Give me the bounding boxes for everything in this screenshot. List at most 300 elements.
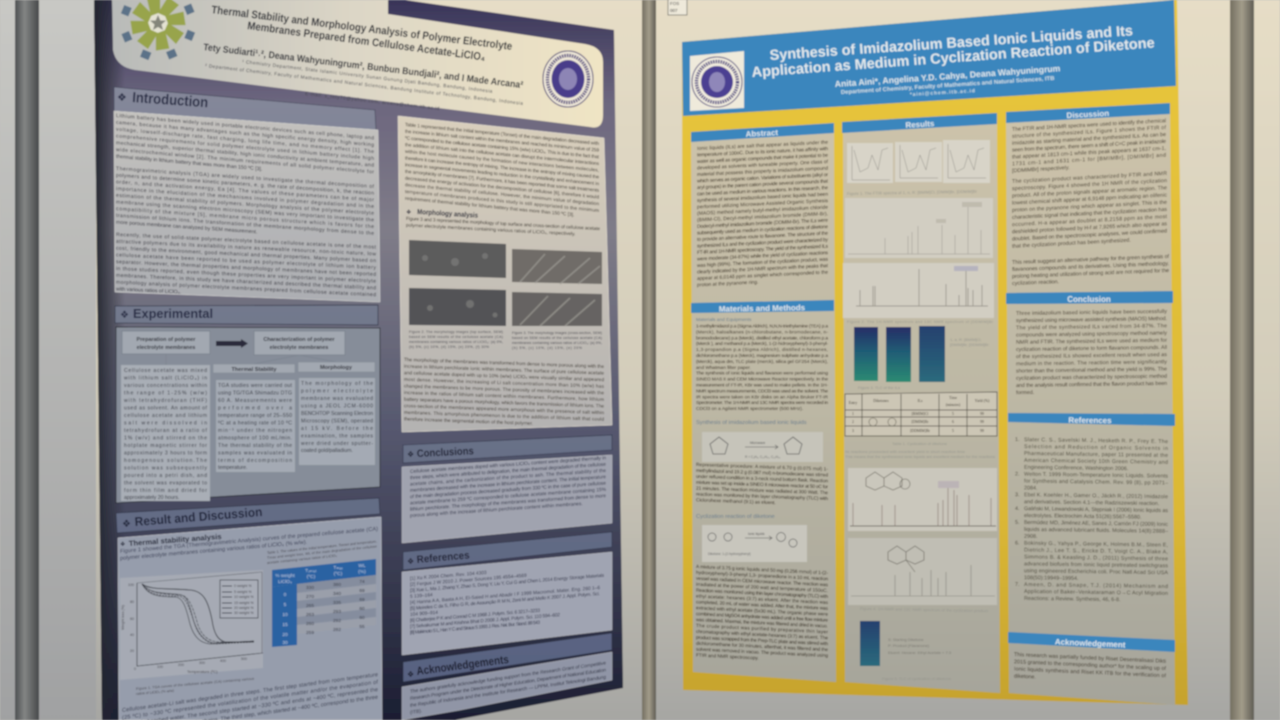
text box: introduction right column with morphology analysis: cross-section of the membranes appeared more amorphous with the presence of salt within	[404, 403, 604, 416]
heading bar: Conclusion: Conclusion	[1067, 295, 1111, 304]
table: cyclization of diketone: [DMIM]Br	[911, 420, 929, 424]
abstract text: Dodecyl-methyl imidazolium bromide (DDMIM-Br). The ILs were	[697, 218, 828, 230]
icon: ITB university seal	[543, 51, 593, 107]
materials text: 1,3-propandion p.a (Sigma Aldrich), distilled n-hexanes,	[696, 347, 828, 353]
acknowledgement text: 2015 granted to the corresponding author* for the scaling up of	[1014, 659, 1166, 672]
acknowledgement text: diketone.	[1014, 674, 1036, 681]
conclusion text: The yield of the synthesized ILs varied from 34-87%. The	[1016, 323, 1167, 331]
text box: introduction left column: attractive polymers due to its availability in nature as renewable resource, non-toxic nature, low	[116, 239, 376, 258]
table caption and notes: Its reactions proceeded with excellent yield in short reaction time	[845, 449, 966, 454]
text box: preparation procedure	[121, 365, 210, 501]
text box: introduction right column with morphology analysis: and cellulose acetate doped with up to 10% (w/w) LiClO₄ were visually similar and appeared	[404, 370, 604, 383]
TGA line chart: 400	[220, 659, 226, 663]
subheading: morphology analysis: ❖	[406, 210, 411, 216]
1H NMR spectrum	[845, 198, 993, 258]
TLC plates: 1, a, R: [BMIM]Cl,	[950, 337, 982, 342]
result panel: Figure 1 showed the TGA (Thermogravimetric Analysis) curves of the prepared cellulose acetate (CA)	[120, 526, 378, 555]
heading bar: Acknowledgement	[1008, 632, 1175, 652]
label: poster board number: 007	[670, 8, 678, 13]
chart legend: 5 weight %	[234, 590, 252, 594]
poster title: Thermal Stability and Morphology Analysis of Polymer Electrolyte	[211, 4, 513, 53]
TLC caption: Figure 3. TLC of the ILs	[858, 385, 900, 390]
references list: Selection and Reduction of Organic Solvents in	[1024, 444, 1168, 452]
cyclization procedure text: A mixture of 3.75 g ionic liquids and 50 mg (0,256 mmol) of 1-(2-	[696, 564, 828, 576]
materials text: CDCl3 on a Agilent NMR spectrometer (500 MHz).	[696, 406, 803, 412]
subheading: synthesis of ionic liquids: Synthesis of imidazolium based ionic liquids	[696, 420, 807, 426]
references list: 6.	[1015, 541, 1019, 547]
table: cyclization of diketone: Yield (%)	[975, 399, 990, 403]
TGA line chart	[120, 570, 263, 680]
materials text: (Merck ), and methanol p.a (Merck), 1-(2-hidroxyphenyl)-3-phenyl-	[696, 341, 828, 347]
representative procedure text: Representative procedure: A mixture of 6.70 g (0.075 mol) 1-	[696, 462, 828, 473]
references list: 4.	[1015, 506, 1019, 512]
table: cyclization of diketone: 5	[952, 412, 954, 416]
text box: introduction right column with morphology analysis: battery separators have a porous morphology, which favors the transmission of lithium ions. The	[404, 397, 604, 410]
text box: introduction left column: membranes. Therefore, in this study we have characterized and described the thermal stability and	[116, 273, 376, 292]
table: thermal properties by LiClO4 content: 69	[359, 588, 365, 594]
text box: introduction right column with morphology analysis: ºC corresponded to the cellulose acetate containing 15% (w/w) LiClO₄. This is due to the fact that	[405, 135, 600, 160]
column: thermal stability: temperature range of 25–550	[218, 413, 292, 419]
SEM figure captions: based on SEM results of the cellulose acetate (CA)	[512, 336, 602, 340]
TLC plates: [DMIM]Br, [DDMIM]Br	[950, 342, 989, 347]
text box: introduction left column: comprehensive requirements for solid polymer electrolyte used in lithium battery include high	[116, 133, 374, 162]
table: thermal properties by LiClO4 content: Tₘₐₓ	[333, 565, 343, 571]
product 1H NMR with structure	[848, 468, 997, 531]
text box: introduction right column with morphology analysis: the increase in lithium salt content within the membranes and reached its minimum value of 259	[405, 129, 599, 154]
references list: using engineered Escherichia coli. Proc Natl Acad Sci USA	[1024, 568, 1168, 576]
abstract text: proton at the pyranone ring.	[697, 279, 758, 288]
references list: Dietrich J., Lee T. S., Ericke D. T, Voigt C. A., Blake A,	[1024, 548, 1168, 556]
SEM figure captions: Figure 2. The morphology images (top surface, SEM)	[409, 330, 503, 334]
table: thermal properties by LiClO4 content: (%)	[358, 569, 366, 575]
column: morphology	[298, 362, 375, 465]
discussion text: imidazole as starting material and the synthesized ILs. As can be	[1012, 132, 1166, 147]
text box: introduction left column: polymers and to determine some kinetic parameters, e. g. the rate of decomposition, k, the reaction	[116, 173, 374, 197]
authors and affiliations: E-mail: s_tety70@yahoo.com, arcana@chem.itb.ac.id	[305, 91, 440, 112]
authors and affiliations: Tety Sudiarti¹˒², Deana Wahyuningrum², Bunbun Bundjali², and I Made Arcana²	[203, 42, 524, 91]
table: thermal properties by LiClO4 content: 60	[359, 615, 365, 621]
materials text: SINEO MAS II and CEM Microwave Reactor respectively. In the	[696, 377, 828, 383]
column: thermal stability: temperature.	[218, 465, 247, 471]
arrow: preparation to characterization	[216, 339, 248, 348]
text box: introduction left column: compatibility of the mixture [5], membrane micro porous structure which is favors for the	[116, 206, 374, 230]
table: thermal properties by LiClO4 content: % weight	[275, 573, 295, 579]
table: thermal properties by LiClO4 content: 282	[333, 627, 341, 633]
table: cyclization of diketone: [DDMIM]Br	[910, 429, 931, 433]
text box: introduction right column with morphology analysis: therefore increase the segmental motion of the host polymer.	[404, 416, 533, 427]
materials text: Materials and Equipments	[696, 317, 752, 323]
text box: preparation procedure: with tetrahydrofuran (THF)	[124, 398, 207, 404]
conclusion text: medium in the reaction. The reaction time were significantly	[1016, 359, 1167, 367]
conclusion text: Three imidazolium based ionic liquids have been successfully	[1016, 309, 1167, 317]
chart legend: 0 weight %	[234, 584, 252, 588]
SEM figure captions: based on SEM results of the cellulose acetate (CA)	[409, 335, 503, 339]
heading bar: Discussion	[1006, 103, 1170, 123]
materials text: 1-methylimidazol p.a (Sigma Aldrich), N,N,N-triethylamine (TEA) p.a	[696, 324, 828, 330]
references list: Simmons B. & Keasling J. D., (2011) Synthesis of three	[1024, 554, 1168, 562]
section: acknowledgements	[402, 633, 612, 720]
acknowledgement text: This research was partially funded by Riset Desentralisasi Dikti	[1014, 652, 1166, 665]
conclusion text: shorter than the conventional method and the yield is 99%. The	[1016, 366, 1167, 375]
abstract text: which serves as organic cation. Variations of substituents (alkyl or	[697, 172, 828, 184]
references list: 5.	[1015, 520, 1019, 526]
poster title: Membranes Prepared from Cellulose Acetate-LiClO₄	[247, 20, 486, 64]
result panel: polymer electrolyte membranes containing various ratios of LiClO₄ (% w/w).	[120, 540, 308, 562]
table: thermal properties by LiClO4 content: 263	[306, 612, 314, 618]
chart caption: ratios of LiClO₄ (% w/w)	[136, 689, 174, 696]
chart caption: Figure 1. TGA curves of the cellulose acetate (CA) containing various	[136, 677, 254, 691]
abstract text: to provide an alternative route to flavanone. The structure of the	[697, 231, 828, 243]
heading bar: Acknowledgements	[403, 633, 612, 682]
heading bar: References: ❖	[407, 557, 414, 566]
heading bar: Results	[842, 113, 997, 133]
subheading: cyclization reaction: Cyclization reaction of diketone	[696, 514, 775, 520]
cyclization procedure text	[696, 564, 829, 665]
table: thermal properties by LiClO4 content: 30	[282, 640, 288, 646]
TGA line chart: 80	[130, 600, 134, 604]
references list: [2] Fergus J W 2010 J. Power Sources 195 4554–4569	[410, 573, 527, 588]
references list: 2.	[1015, 472, 1019, 478]
references list: Galiński M, Lewandowski A, Stępniak I (2006) Ionic liquids as	[1024, 506, 1168, 514]
references list	[402, 552, 612, 655]
references list: [3] Xue L, Ma J, Zhang Y, Zhao S, Dong Y, Liu Y, Cui G and Chen L 2014 Energy Storage Materials	[410, 573, 605, 594]
table: thermal properties by LiClO4 content: 20	[282, 632, 288, 638]
product TLC plate: Eluent: Hexane: Ethyl Acetate = 7:3	[888, 650, 952, 655]
table: thermal properties by LiClO4 content: 5	[284, 602, 287, 608]
column: thermal stability: performed over a	[218, 406, 292, 412]
abstract text	[697, 140, 829, 288]
references list: Ebel K. Koehler H., Gamer O., Jäckh R., (2012) Imidazole	[1024, 492, 1168, 500]
references list: Engineering Conference, Washington 2006.	[1024, 465, 1128, 472]
table: thermal properties by LiClO4 content: 330	[306, 585, 314, 591]
column: morphology: using a JEOL JCM-6000	[301, 404, 373, 410]
table caption and notes: This means that the synthesized ionic liquids are excellent medium for the reactions	[845, 454, 995, 459]
references list: and derivatives. Section 4.1—the Radziszewski reaction.	[1024, 499, 1159, 507]
section: introduction	[114, 87, 612, 432]
text box: introduction left column: wide electrochemical window [2]. The minimum requirements of all solid polymer electrolyte for	[116, 147, 374, 176]
conclusion text: NMR and FTIR. The synthesized ILs were used as medium for	[1016, 338, 1167, 346]
table: thermal properties by LiClO4 content: Tₒₙₛₑₜ	[305, 568, 317, 574]
references list: American Chemical Society 10th Green Chemistry and	[1024, 458, 1168, 466]
heading bar: Materials and Methods: Materials and Methods	[719, 303, 806, 314]
TGA line chart: 100	[128, 583, 134, 587]
column: morphology: The morphology of the	[301, 381, 373, 387]
conclusion text: compounds were analyzed using spectroscopy method namely	[1016, 330, 1167, 339]
step box: preparation: electrolyte membranes	[137, 345, 195, 351]
table: thermal properties by LiClO4 content: acetate containing various ratios of LiClO₄	[267, 554, 338, 565]
table: cyclization of diketone: 99	[980, 420, 984, 424]
table: cyclization of diketone: Diketones	[873, 399, 889, 403]
text box: introduction left column: Lithium battery has been widely used in portable electronic devices such as cell phone, laptop and	[116, 113, 374, 142]
TGA line chart: 200	[178, 663, 184, 667]
product 13C NMR with structure	[848, 538, 997, 605]
step box: preparation	[122, 331, 210, 354]
abstract text: synthesized ILs and the cyclization product were characterized by	[697, 237, 828, 249]
table: thermal properties by LiClO4 content: 380	[333, 582, 341, 588]
FTIR caption: Figure 1. The FTIR spectra of 1, n, R: [BMIM]Cl, [DMIM]Br, [DDMIM]Br	[847, 189, 978, 196]
table: thermal properties by LiClO4 content: 292	[333, 618, 341, 624]
references list: for Synthesis and Catalysis Chem. Rev. 99 (8), pp 2071–	[1024, 479, 1168, 487]
cyclization procedure text: was obtained. Maxmai, the mixture was filtered and dried in vacuo.	[696, 617, 828, 630]
column: morphology: Morphology	[320, 365, 353, 371]
representative procedure text: mixture was set up inside a SINEO II microwave reactor at 50 oC for	[696, 480, 828, 490]
table: thermal properties by LiClO4 content: 0	[284, 592, 287, 598]
conclusions text box: three steps, which were attributed to delignation, the main thermal degradation of the cellulose	[410, 462, 606, 481]
table: cyclization of diketone: 2	[852, 420, 854, 424]
table: thermal properties by LiClO4 content: 10	[282, 612, 288, 618]
step box: characterization: Characterization of polymer	[263, 337, 336, 343]
title panel	[112, 0, 603, 128]
column 3: discussion, conclusion, references, acknowledgement	[1006, 103, 1175, 705]
heading bar: Introduction: ❖	[117, 92, 127, 104]
materials text: (Merck), haloalkanes (n-chlorobutane, n-bromodecane, n-	[696, 329, 828, 335]
heading bar: References: References	[1068, 416, 1112, 425]
table: cyclization of diketone: 3	[852, 429, 854, 433]
discussion text: [DDMIMBr] respectively.	[1012, 165, 1070, 174]
heading bar: Conclusions	[403, 435, 612, 463]
SEM figure captions: (b) 5%, (c) 10%, (d) 15%, (e) 20%, (f) 30%	[409, 345, 490, 349]
representative procedure text: methylindazol and 19.2 g (0.087 mol) n-bromodecane was stirred	[696, 468, 828, 479]
table caption and notes: Table 1. Cyclization of diketone	[892, 441, 948, 446]
conclusion text: synthesized using microwave assisted synthesis (MAOS) Method.	[1016, 316, 1167, 324]
conclusions text box: membranes decreased with the increase in lithium perchlorate content. The initial temperature	[410, 474, 606, 494]
column 1: abstract and materials	[691, 123, 836, 682]
representative procedure text: Ciclorohexe methanol (9:1) as eluent.	[696, 497, 776, 506]
table: thermal properties by LiClO4 content: 260	[306, 621, 314, 627]
column 3: discussion, conclusion, references, acknowledgement: characteristic signal that indicating that the cyclization reaction has	[1012, 207, 1167, 221]
text box: preparation procedure: various concentrations within	[124, 383, 207, 389]
column 2: results	[842, 113, 1000, 693]
column: thermal stability: terms of decomposition	[218, 458, 292, 464]
product TLC plate	[860, 621, 952, 666]
column: morphology: polymer electrolyte	[301, 388, 373, 394]
text box: introduction left column: cost, friendly to the environment, good mechanical and thermal properties. Many polymer based on	[116, 246, 376, 264]
NMR caption: Figure 2. The 1H-NMR spectrum and 13C NMR spectrum of [DDMIM]Br	[847, 319, 994, 324]
materials text: (Merck), aqua dm, TLC plate (merck), silica gel GF254 (Merck),	[696, 359, 828, 365]
table: thermal properties by LiClO4 content: 265	[306, 603, 314, 609]
references list: 2084.	[1024, 485, 1037, 492]
column: thermal stability: Thermal Stability	[231, 367, 277, 373]
text box: introduction left column: cellulose acetate have been reported to be used as polymer electrolyte of lithium ion battery	[116, 252, 376, 271]
cyclization procedure text: Reaction was monitored using thin layer chromatography (TLC) with	[696, 588, 828, 600]
cyclization procedure text: dichloromethane for 30 minutes, afterthat, it was filtered and the	[696, 641, 828, 653]
representative procedure text	[696, 462, 828, 508]
heading bar: References	[403, 532, 612, 570]
chart legend: 10 weight %	[234, 595, 254, 599]
table: thermal properties by LiClO4 content: 15	[282, 622, 288, 628]
text box: introduction left column: mechanical strength, superior thermal stability, high ionic conductivity at ambient temperature, and	[116, 140, 374, 169]
references list: 108(50):19949–19954.	[1024, 575, 1079, 582]
heading bar: Materials and Methods	[691, 300, 834, 314]
column 3: discussion, conclusion, references, acknowledgement: product. All of the proton signals appear at aromatic region. The	[1012, 185, 1167, 199]
column 3: discussion, conclusion, references, acknowledgement: This result suggest an alternative pathway for the green synthesis of	[1012, 254, 1169, 266]
reaction scheme: imidazolium synthesis	[702, 432, 823, 462]
text box: introduction right column with morphology analysis: polymer electrolyte membranes containing various ratios of LiClO₄, respectively.	[406, 223, 575, 237]
references list: advanced biofuels from ionic liquid pretreated switchgrass	[1024, 561, 1168, 569]
chart legend: 15 weight %	[234, 601, 254, 605]
text box: introduction left column: with various ratios of LiClO₄.	[116, 286, 181, 296]
cyclization procedure text: ethyl acetate: hexanes (3:7) as eluent. After the reaction was	[696, 594, 829, 606]
references list: 2908.	[1024, 534, 1037, 540]
cyclization procedure text: product was scrapped from the Prep-TLC plate and was stirred with	[696, 635, 828, 647]
text box: introduction right column with morphology analysis: therefore it can increase the entropy of mixing. The increase in the entropy of mixing caused the	[405, 156, 599, 181]
table: cyclization of diketone: [BMIM]Cl	[912, 412, 928, 416]
step box: characterization: electrolyte membranes	[270, 345, 328, 351]
result panel	[118, 517, 382, 720]
text box: introduction right column with morphology analysis: changed the membranes to be more porous. The porosity of membranes increased with the	[404, 383, 604, 396]
poster title: Application as Medium in Cyclization Reaction of Diketone	[751, 35, 1155, 81]
abstract text: can be used as medium in various reactions. In this research, the	[697, 185, 828, 197]
heading bar: References	[1008, 413, 1175, 426]
representative procedure text: under refluxed condition in a 3-neck round bottom flask. Reaction	[696, 474, 828, 484]
table: cyclization of diketone: Entry	[849, 401, 857, 405]
column: thermal stability: atmosphere of 100 mL/min.	[218, 436, 292, 442]
text box: introduction right column with morphology analysis: The morphology of the membranes was transformed from dense to more porous along with the	[404, 357, 604, 370]
heading bar: Experimental: ❖	[120, 310, 129, 321]
cyclization procedure text: combined and MgSO4 anhydrate was added until a free flow mixture	[696, 611, 828, 624]
acknowledgements text box: Research Program under the Directorate of Higher Education, Department of National Education	[410, 667, 606, 702]
icon: islamic star logo	[121, 0, 195, 60]
column 3: discussion, conclusion, references, acknowledgement: lowest chemical shift appear at 6,9148 ppm indicating an olifenic	[1012, 192, 1167, 207]
text box: preparation procedure: 1% (w/v) and stirred on the	[124, 436, 207, 442]
column 3: discussion, conclusion, references, acknowledgement: The cyclization product was characterized by FTIR and NMR	[1012, 171, 1167, 185]
conclusions text box: lithium perchlorate. The morphology of the membranes was transformed from dense to more	[410, 493, 606, 513]
references list: Bokinsky G., Yahya P., George K, Holmes B.M., Steen E,	[1024, 541, 1168, 549]
references list: Ameen, D. and Snape, T.J. (2014) Mechanism and	[1024, 582, 1168, 590]
cyclization procedure text: chromatography with ethyl acetate-hexanes (3:7) as eluent. The	[696, 629, 828, 641]
materials text: NMR spectrum measurements, CDCl3 was used as the solvent. The	[696, 388, 828, 394]
text box: introduction left column: separator. However, the thermal properties and morphology of membranes have not been reported	[116, 259, 376, 278]
table: thermal properties by LiClO4 content: 270	[306, 594, 314, 600]
cyclization procedure text: FTIR and NMR spectroscopy.	[696, 653, 759, 662]
materials text: dichloromethane p.a (Merck), magnesium sulphate anhydrate p.a	[696, 353, 828, 359]
text box: preparation procedure: the solvent was evaporated to	[124, 480, 207, 486]
table: thermal properties by LiClO4 content	[267, 539, 377, 647]
authors and affiliation: Department of Chemistry, Faculty of Mathematics and Natural Sciences, ITB	[841, 76, 1055, 96]
text box: introduction left column	[114, 111, 380, 305]
text box: introduction left column: importance in the elucidation of the mechanisms involved in polymer degradation and in the	[116, 186, 374, 210]
heading bar: Result and Discussion	[116, 498, 380, 533]
references list: Welton T. 1999 Room-Temperature Ionic Liquids. Solvents	[1024, 472, 1168, 480]
acknowledgements text box	[402, 652, 612, 720]
subheading: morphology analysis: Morphology analysis	[417, 207, 478, 220]
TGA line chart: 300	[199, 661, 205, 665]
column: thermal stability: using TG/TGA Shimadzu DTG	[218, 390, 292, 396]
discussion text: 1731 cm-1 and 1631 cm-1 for [BMIMBr], [DMIMBr] and	[1012, 153, 1166, 167]
abstract text: temperature of 100oC. Due to its ionic nature, it has affinity with	[697, 146, 828, 158]
TGA line chart: 100	[157, 665, 163, 669]
reaction scheme: cyclization: Diketone: 1-(2-hydroxyphenyl)	[708, 552, 751, 556]
column: thermal stability: samples was evaluated in	[218, 450, 292, 456]
table: thermal properties by LiClO4 content: LiClO₄	[278, 579, 292, 585]
heading bar: Introduction: Introduction	[132, 90, 209, 111]
abstract text: Ionic liquids (ILs) are salt that appear as liquids under the	[697, 140, 828, 152]
text box: preparation procedure: approximately 20 hours.	[124, 495, 179, 501]
cyclization procedure text: The crude product was purified by preparative thin layer	[696, 623, 828, 635]
acknowledgements text box: the Republic of Indonesia and the Institute for Research — LPPM, Institut Teknologi Bandung	[410, 674, 606, 709]
cyclization procedure text: vessel was radiated in CEM microwave reactor. The reaction was	[696, 576, 829, 588]
table: thermal properties by LiClO4 content: Tmax and weight loss, WL of the main degradation of the cellulose	[267, 544, 377, 560]
conclusions text box: acetate membrane to 259 ºC corresponded to cellulose acetate membrane containing 15%	[410, 487, 607, 506]
text box: introduction right column with morphology analysis	[398, 116, 612, 432]
abstract text: synthesis of several imidazolium based ionic liquids had been	[697, 192, 828, 204]
abstract text: performed utilizing Microwave Assisted Organic Synthesis	[697, 198, 828, 210]
abstract text: (BMIM-Cl), Decyl-methyl imidazolium bromide (DMIM-Br),	[697, 211, 828, 223]
product TLC caption: Figure 5. TLC of cyclization of diketone	[882, 676, 952, 681]
text box: preparation procedure: homogenous solution.The	[124, 458, 207, 464]
references list	[1015, 437, 1168, 604]
column: morphology: at 15 kV. Before the	[301, 426, 373, 432]
right poster: synthesis of imidazolium based ionic liquids	[682, 0, 1188, 705]
references list: Application of Baker–Venkataraman O→C Acyl Migration	[1024, 589, 1168, 597]
references list: 3.	[1015, 492, 1019, 498]
heading bar: Result and Discussion: ❖	[122, 519, 131, 530]
label: poster board number	[668, 0, 687, 15]
chart legend: 30 weight %	[234, 611, 254, 615]
text box: introduction right column with morphology analysis: Figure 3 and 3 represented the morphology of top surface and cross-section of cellulose acetate	[406, 216, 600, 232]
SEM micrograph grid	[409, 240, 602, 326]
references list: 104 909–914	[410, 610, 438, 618]
column 3: discussion, conclusion, references, acknowledgement: deshielded proton followed by H-f at 7,9265 which also appear as	[1012, 221, 1167, 235]
text box: introduction right column with morphology analysis: increase in segmental movements leading to reduction in the crystallinity and enhancement in	[405, 162, 599, 187]
heading bar: Abstract: Abstract	[745, 128, 779, 139]
conclusion text	[1016, 309, 1167, 396]
text box: preparation procedure: hotplate magnetic stirrer for	[124, 443, 207, 449]
references list: electrolytes. Electrochim Acta 51(26):5567–5580.	[1024, 513, 1141, 521]
heading bar: References: References	[416, 549, 470, 566]
text box: preparation procedure: cellulose acetate and lithium	[124, 413, 207, 419]
reaction scheme: imidazolium synthesis: R = C₄H₉, C₁₀H₂₁, C₁₂H₂₅	[745, 455, 781, 459]
text box: introduction left column: thermal stability in lithium battery that was more than 150 ºC [3].	[116, 154, 262, 173]
text box: introduction left column: order, n, and the activation energy, Ea [4]. The values of these parameters can be of major	[116, 179, 374, 203]
abstract text: material that possess this property is imidazolium compound	[697, 166, 828, 178]
experimental flow panel	[116, 327, 380, 503]
table: thermal properties by LiClO4 content: Table 1. The values of the initial temperature, Tonset and temperature,	[267, 539, 377, 555]
table: cyclization of diketone	[845, 392, 997, 436]
text box: introduction left column: estimation of the thermal stability of polymers. Morphology analysis of the polymer electrolyte	[116, 193, 374, 217]
text box: preparation procedure: the range of 1-25% (w/w)	[124, 390, 207, 396]
section: references	[402, 532, 612, 655]
column: thermal stability: ºC at a heating rate of 10 ºC	[218, 420, 292, 426]
product TLC plate: S: Starting Diketone	[888, 637, 924, 642]
product TLC plate: P: Product (Flavanone)	[888, 643, 930, 648]
table: cyclization of diketone: 5	[952, 429, 954, 433]
references list: liquids as advanced lubricant fluids. Molecules 14(8):2888–	[1024, 527, 1168, 535]
column 3: discussion, conclusion, references, acknowledgement: cyclization reaction.	[1012, 279, 1059, 287]
text box: preparation procedure: Cellulose acetate was mixed	[124, 368, 207, 374]
text box: introduction right column with morphology analysis: within the host molecule caused by the formation of new interactions between molecules,	[405, 149, 599, 174]
text box: preparation procedure: poured into a petri dish, and	[124, 473, 207, 479]
text box: introduction left column: morphology analysis of polymer electrolyte membranes prepared from cellulose acetate contained	[116, 280, 376, 298]
reaction scheme: cyclization	[702, 525, 807, 562]
discussion text: The FTIR and 1H-NMR spectra were used to identify the chemical	[1012, 118, 1166, 133]
column 3: discussion, conclusion, references, acknowledgement: prolong heating and utilization of strong acid are not required for the	[1012, 268, 1169, 280]
references list: Slater C. S., Savelski M. J., Hesketh R. P., Frey E. The	[1024, 437, 1168, 445]
table: cyclization of diketone: ILs	[917, 399, 923, 403]
column 3: discussion, conclusion, references, acknowledgement: doublet. Based on the spectroscopic analyses, we could confirmed	[1012, 228, 1167, 243]
column: thermal stability: TGA studies were carried out	[218, 383, 293, 389]
heading bar: Discussion: Discussion	[1066, 109, 1110, 120]
representative procedure text: reaction was monitored by thin layer chromatography (TLC) with	[696, 492, 828, 502]
text box: introduction left column: membrane using the scanning electron microscopy (SEM) was very important to investigate the	[116, 200, 374, 224]
materials text: IR spectra were taken on KBr disks on an Alpha Bruker FT-IR	[696, 394, 829, 400]
column: thermal stability	[213, 364, 295, 472]
cyclization procedure text: irradiated at the power of 200 watt and temperature of 150oC.	[696, 582, 828, 594]
materials text: bromododecane) p.a (Merck), distilled ethyl acetate, chloroform p.a	[696, 335, 828, 341]
cyclization procedure text: solvent was removed in vacuo. The product was analyzed using	[696, 647, 828, 659]
table: thermal properties by LiClO4 content: (ºC)	[334, 571, 343, 577]
table: cyclization of diketone: 1	[852, 412, 854, 416]
